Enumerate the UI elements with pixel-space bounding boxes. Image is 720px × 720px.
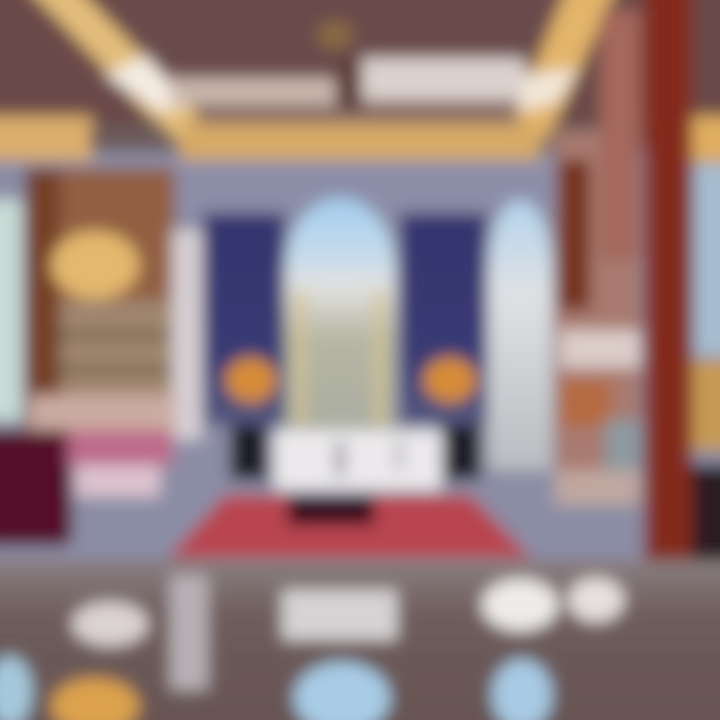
far right window: [692, 165, 720, 590]
floor reflections: blue: [0, 656, 552, 720]
wall background: [0, 150, 720, 570]
white central sofa: [274, 430, 442, 490]
dark coffee table: [288, 495, 374, 525]
floor reflections: white: [72, 575, 624, 690]
ceiling gold beams: [0, 0, 720, 162]
red carpet: [168, 495, 532, 558]
floor: [0, 560, 720, 720]
crimson armchair: [0, 430, 72, 546]
ceiling: [0, 0, 720, 125]
floor reflection: orange: [51, 678, 139, 720]
orange lamps: [225, 357, 477, 403]
red column: [644, 0, 692, 580]
navy panels: [203, 213, 487, 425]
frieze band: [170, 160, 560, 210]
blurred ceiling title shapes: [105, 21, 578, 112]
left window: [0, 200, 22, 420]
right arched window: [488, 200, 552, 470]
dark lamp bases: [230, 425, 481, 480]
left shelving alcove: [25, 168, 202, 440]
pink seating: [68, 430, 173, 497]
central arched window: [285, 198, 395, 432]
right shelving: [555, 10, 640, 505]
